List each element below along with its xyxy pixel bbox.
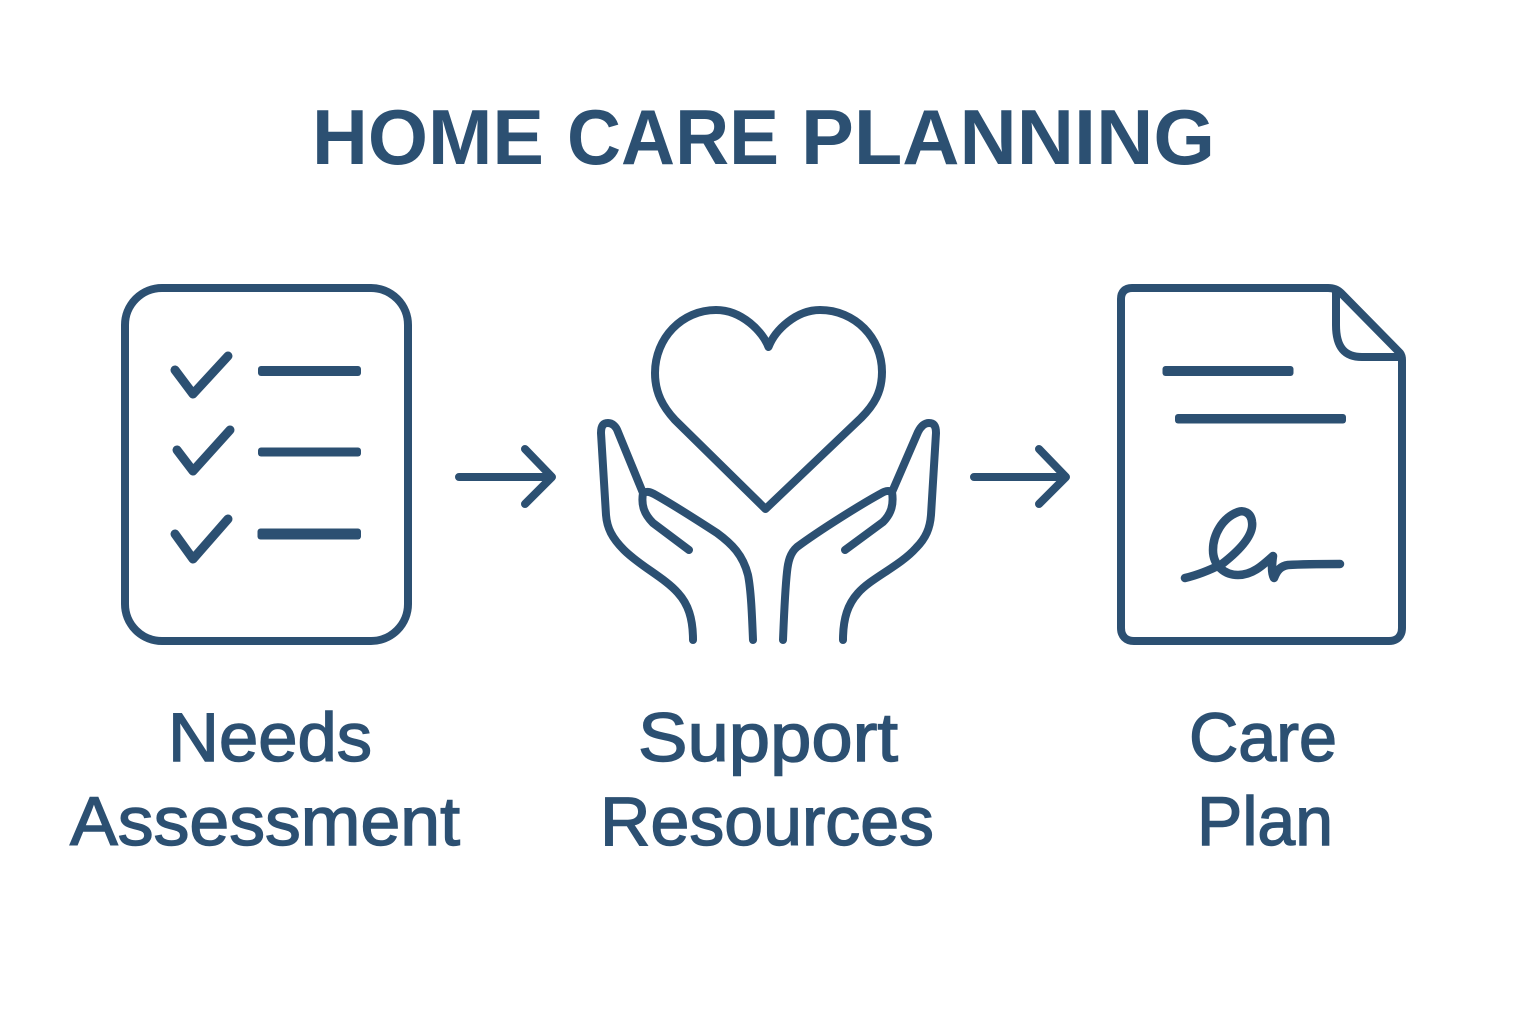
label: Support Resources xyxy=(600,699,934,860)
title: CARE xyxy=(567,93,779,181)
title: PLANNING xyxy=(801,93,1215,181)
label: Needs Assessment xyxy=(70,699,460,860)
label: Support Resources: Support xyxy=(638,699,898,776)
title: HOME xyxy=(312,93,544,181)
label: Care Plan: Care xyxy=(1189,699,1337,776)
arrow: resources to care plan xyxy=(974,449,1066,504)
icon: signed document xyxy=(1121,288,1402,641)
label: Support Resources: Resources xyxy=(600,783,934,860)
label: Care Plan: Plan xyxy=(1197,783,1333,860)
label: Needs Assessment: Assessment xyxy=(70,783,460,860)
label: Care Plan xyxy=(1189,699,1337,860)
icon: hands holding heart xyxy=(601,310,936,640)
title xyxy=(312,93,1215,181)
label: Needs Assessment: Needs xyxy=(168,699,372,776)
arrow: assessment to resources xyxy=(459,449,552,504)
icon: checklist xyxy=(125,288,408,641)
